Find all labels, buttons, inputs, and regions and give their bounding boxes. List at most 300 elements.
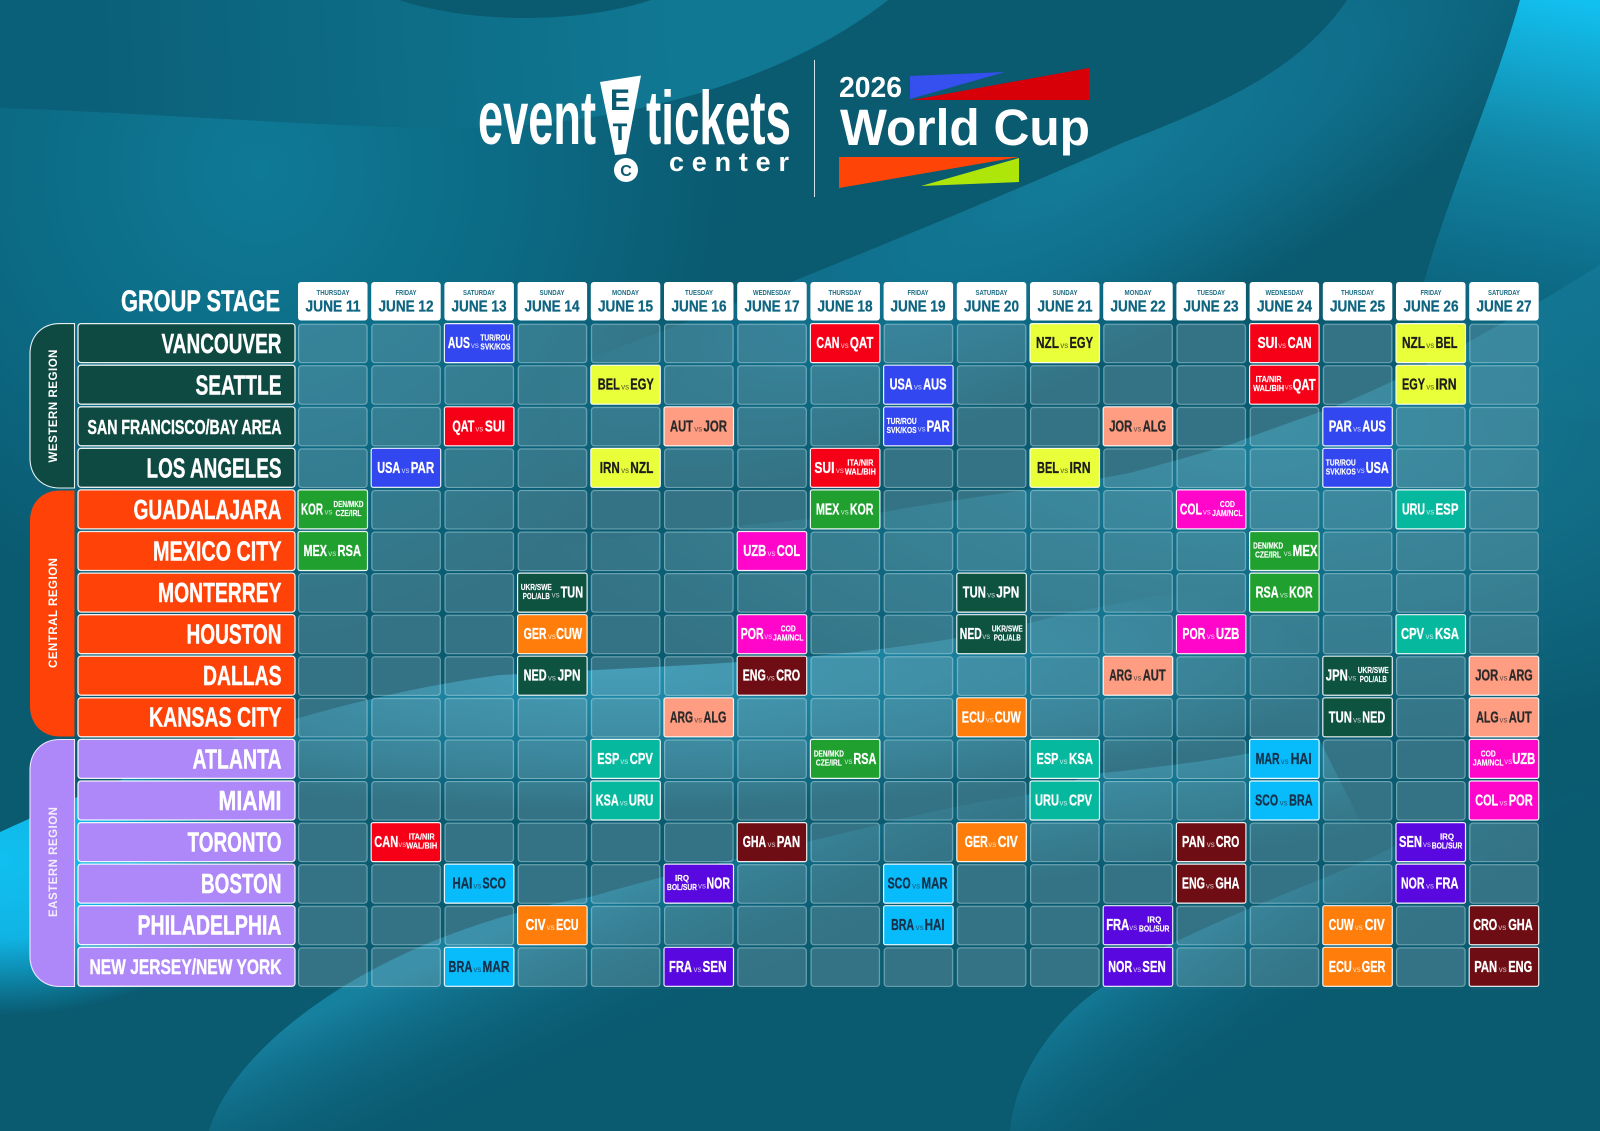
matches: New Jersey/New York: NOR [1108,959,1132,976]
matches: Los Angeles: SUI [814,460,834,477]
matches: Miami: COL [1475,792,1498,810]
matches: Toronto: CAN [374,834,398,851]
matches: Houston: GER [524,626,547,643]
matches: Houston: COD [781,624,796,634]
matches: Miami: vs [1499,798,1507,808]
matches: Boston: vs [912,882,920,891]
matches: Miami: vs [1060,798,1068,808]
matches: Vancouver: vs [1278,341,1286,350]
city labels: VANCOUVER [162,328,282,359]
matches: Houston: CPV [1401,626,1424,643]
matches: Houston: CUW [556,626,582,643]
matches: Philadelphia: vs [1129,923,1137,932]
matches: Seattle [591,365,1466,404]
matches: Dallas: vs [1499,674,1507,683]
region: eastern [30,740,74,986]
matches: Dallas: JPN [1326,668,1348,685]
matches: Seattle: EGY [630,377,654,394]
matches: Vancouver: vs [841,341,849,350]
matches: Atlanta: COD [1481,748,1496,758]
city labels: MIAMI [218,785,282,816]
city labels: MEXICO CITY [153,536,282,566]
date header row: JUNE 27 [1476,298,1532,316]
matches: Boston: ENG [1182,876,1205,893]
matches: Miami: SCO [1255,792,1278,810]
matches: Philadelphia: vs [1498,923,1506,932]
matches: Atlanta: vs [1060,757,1068,766]
date header row: SATURDAY [976,290,1008,297]
city labels: GUADALAJARA [134,494,282,525]
region: western [30,324,74,488]
matches: Los Angeles: vs [1357,466,1365,475]
date header row: JUNE 11 [306,298,361,316]
matches: Mexico City: vs [1284,549,1292,558]
matches: Mexico City: UZB [743,543,766,560]
matches: Atlanta [591,739,1539,778]
date header row [298,282,1539,320]
matches: Guadalajara: vs [1203,507,1211,516]
date header row: THURSDAY [1341,290,1374,297]
date header row: WEDNESDAY [1266,290,1304,297]
matches: New Jersey/New York: MAR [482,959,509,976]
date header row: JUNE 17 [744,298,800,316]
date header row: SUNDAY [540,290,565,297]
matches: Guadalajara: MEX [816,501,840,518]
matches: Monterrey: vs [987,591,995,600]
matches: Kansas City: NED [1362,709,1385,726]
matches: Monterrey: TUN [963,585,986,602]
city labels: SEATTLE [196,370,282,400]
matches: Vancouver [444,324,1465,363]
matches: Philadelphia: HAI [925,917,945,934]
city labels: DALLAS [203,660,282,691]
matches: Dallas: POL/ALB [1360,674,1387,684]
matches: Seattle: vs [1285,383,1293,392]
city labels [78,324,295,986]
matches: Kansas City: ALG [1476,709,1499,726]
matches: Vancouver: EGY [1070,335,1093,352]
matches: Dallas: AUT [1143,668,1166,685]
matches: Vancouver: BEL [1436,335,1458,352]
city labels: BOSTON [201,868,282,899]
matches: Los Angeles: WAL/BIH [845,466,876,476]
matches: Toronto: SEN [1399,834,1422,851]
matches: San Francisco: AUS [1362,418,1386,435]
matches: Monterrey: RSA [1256,585,1279,602]
city labels: HOUSTON [186,618,282,650]
divider line [814,60,815,197]
logo: 2026 World Cup: 2026 [839,72,902,104]
matches: Kansas City: TUN [1329,709,1352,726]
city labels: KANSAS CITY [149,702,282,732]
logo: 2026 World Cup: World Cup [840,99,1090,156]
matches: Philadelphia: vs [1355,923,1363,932]
matches: Monterrey [518,573,1319,612]
matches: Dallas: vs [548,674,556,683]
matches: New Jersey/New York: ECU [1329,959,1352,976]
matches: Miami: vs [620,798,628,808]
matches: Philadelphia: vs [547,923,555,932]
city labels: ATLANTA [192,744,282,774]
matches: San Francisco: vs [918,424,926,433]
matches: Los Angeles: TUR/ROU [1326,457,1356,467]
date header row: THURSDAY [828,290,862,297]
matches: Houston: vs [1207,632,1215,641]
matches: Philadelphia: BRA [891,917,914,934]
matches: Toronto: vs [988,840,996,849]
matches: New Jersey/New York: BRA [448,959,472,976]
city labels: PHILADELPHIA [138,910,282,940]
matches: Monterrey: vs [1280,591,1288,600]
matches: Atlanta: ESP [597,751,619,768]
matches: Toronto: PAN [1182,834,1205,851]
matches: Mexico City: vs [328,549,336,558]
matches: Miami: BRA [1289,792,1313,810]
date header row: TUESDAY [685,290,713,297]
matches: Monterrey: TUN [561,585,583,602]
logo: event tickets center: tickets [646,76,791,161]
matches: Atlanta: UZB [1512,751,1535,768]
matches: Los Angeles: BEL [1037,460,1059,477]
matches: Seattle: IRN [1436,377,1456,394]
matches: Atlanta: CZE/IRL [816,757,842,767]
matches: Mexico City: COL [777,543,800,560]
matches: Houston: vs [982,632,990,641]
matches: New Jersey/New York [444,947,1539,986]
date header row: JUNE 16 [672,298,727,316]
matches: Seattle: vs [621,383,629,392]
matches: New Jersey/New York: vs [1353,965,1361,974]
matches: Guadalajara: URU [1402,501,1425,518]
matches: Boston: HAI [452,876,472,893]
matches: Atlanta: HAI [1291,751,1312,768]
matches: Houston: POR [741,626,764,643]
matches: Houston: UZB [1216,626,1239,643]
matches: San Francisco: vs [1133,424,1141,433]
date header row: MONDAY [612,290,639,297]
matches: Guadalajara: vs [841,507,849,516]
logo: event tickets center: center [669,147,789,177]
matches: Miami: URU [1035,792,1059,810]
matches: Guadalajara: CZE/IRL [336,508,362,518]
matches: Boston: vs [1206,882,1214,891]
matches: Seattle: vs [1426,383,1434,392]
date header row: JUNE 14 [524,298,580,316]
matches: Vancouver: CAN [816,335,839,352]
matches: New Jersey/New York: vs [1499,965,1507,974]
matches: Vancouver: vs [471,341,479,350]
matches: Philadelphia: ECU [556,917,579,934]
matches: New Jersey/New York: vs [1133,965,1141,974]
matches: Los Angeles: USA [377,460,400,477]
matches: Atlanta: vs [1504,757,1512,766]
matches: Miami: CPV [1069,792,1092,810]
matches: Guadalajara: KOR [850,501,873,518]
matches: Los Angeles: IRN [600,460,620,477]
date header row: FRIDAY [908,290,929,297]
matches: Vancouver: SUI [1258,335,1278,352]
matches: Los Angeles: vs [402,466,410,475]
logo: event tickets center: E [610,84,630,117]
city labels: MONTERREY [158,577,282,608]
matches: Boston: vs [1426,882,1434,891]
date header row: SUNDAY [1052,290,1078,297]
matches: Miami: KSA [596,792,619,810]
matches: Los Angeles: ITA/NIR [847,457,873,467]
date header row: JUNE 25 [1330,298,1385,316]
matches: New Jersey/New York: SEN [1142,959,1166,976]
matches: Boston: vs [698,882,706,891]
matches: Toronto: GER [965,834,988,851]
matches: New Jersey/New York: SEN [702,959,726,976]
matches: Boston: vs [473,882,481,891]
matches: Kansas City: vs [1353,715,1361,724]
matches: Atlanta: MAR [1256,751,1280,768]
matches: Los Angeles: SVK/KOS [1326,466,1356,476]
matches: Atlanta: KSA [1069,751,1093,768]
matches: Boston: NOR [706,876,730,893]
matches: Atlanta: vs [1281,757,1289,766]
matches: Guadalajara: KOR [301,501,323,518]
matches: Guadalajara: vs [1426,507,1434,516]
matches: Houston: NED [960,626,982,643]
matches: Atlanta: RSA [853,751,876,768]
matches: Kansas City: ARG [670,709,693,726]
matches: Dallas: ARG [1509,668,1533,685]
matches: Guadalajara: COD [1220,499,1235,509]
matches: Philadelphia: FRA [1106,917,1129,934]
matches: Atlanta: vs [620,757,628,766]
matches: Philadelphia [518,906,1539,945]
matches: Monterrey: vs [552,591,560,600]
matches: Houston: JAM/NCL [773,633,803,643]
matches: Boston: BOL/SUR [667,882,697,892]
matches: Toronto: GHA [743,834,766,851]
matches: Atlanta: CPV [630,751,653,768]
matches: Mexico City: CZE/IRL [1255,550,1281,560]
matches: Mexico City [298,532,1319,570]
matches: Monterrey: UKR/SWE [521,582,552,592]
matches: Philadelphia: CUW [1329,917,1354,934]
matches: Kansas City: CUW [995,709,1021,726]
matches: Dallas [518,656,1539,695]
date header row: JUNE 20 [964,298,1019,316]
matches: San Francisco: PAR [1329,418,1352,435]
matches: Dallas: vs [767,674,775,683]
matches: Los Angeles: vs [1060,466,1068,475]
matches: San Francisco: PAR [927,418,950,435]
matches: Guadalajara: COL [1180,501,1202,518]
matches: San Francisco: JOR [704,418,727,435]
matches: Miami [591,781,1539,820]
matches: Seattle: EGY [1402,377,1425,394]
matches: Boston: GHA [1215,876,1239,893]
matches: Seattle: vs [914,383,922,392]
logo: event tickets center: C [620,163,632,180]
matches: San Francisco: SUI [485,418,505,435]
matches: Houston: POR [1182,626,1205,643]
matches: New Jersey/New York: PAN [1474,959,1497,976]
matches: Kansas City: vs [694,715,702,724]
matches: Toronto: vs [1423,840,1431,849]
matches: Vancouver: NZL [1402,335,1425,352]
matches: Los Angeles: vs [621,466,629,475]
matches: New Jersey/New York: GER [1362,959,1385,976]
matches: Toronto: vs [768,840,776,849]
matches: Toronto: BOL/SUR [1432,841,1462,851]
matches: Vancouver: TUR/ROU [480,333,510,343]
matches: Toronto: CIV [998,834,1018,851]
matches: Guadalajara [298,490,1466,529]
date header row: MONDAY [1124,290,1152,297]
matches: Kansas City [664,698,1539,737]
matches: Philadelphia: BOL/SUR [1139,924,1169,934]
matches: San Francisco: JOR [1109,418,1132,435]
date header row: JUNE 24 [1257,298,1312,316]
matches: San Francisco [444,407,1392,446]
matches: Boston: FRA [1436,876,1458,893]
matches: Los Angeles [371,448,1392,487]
matches: Vancouver: vs [1426,341,1434,350]
matches: Los Angeles: NZL [630,460,653,477]
matches: Dallas: CRO [776,668,800,685]
matches: New Jersey/New York: FRA [669,959,692,976]
matches: Miami: vs [1280,798,1288,808]
matches: New Jersey/New York: vs [694,965,702,974]
matches: San Francisco: vs [694,424,702,433]
matches: San Francisco: QAT [452,418,475,435]
matches: Seattle: ITA/NIR [1256,374,1282,384]
matches: Kansas City: vs [986,715,994,724]
matches: San Francisco: SVK/KOS [887,425,917,435]
region: central [30,490,74,736]
matches: Philadelphia: CIV [1365,917,1385,934]
matches: Dallas: vs [1348,674,1356,683]
matches: Kansas City: vs [1499,715,1507,724]
matches: Vancouver: vs [1060,341,1068,350]
date header row: JUNE 26 [1404,298,1459,316]
matches: Kansas City: ECU [962,709,985,726]
matches: Dallas: ARG [1109,668,1132,685]
matches: Guadalajara: JAM/NCL [1212,508,1243,518]
date header row: THURSDAY [316,290,350,297]
date header row: JUNE 15 [598,298,653,316]
matches: San Francisco: TUR/ROU [887,416,917,426]
date header row: SATURDAY [463,290,495,297]
matches: San Francisco: ALG [1143,418,1166,435]
matches: Houston: vs [548,632,556,641]
matches: Monterrey: JPN [996,585,1019,602]
logo: event tickets center: event [478,76,596,161]
date header row: JUNE 13 [452,298,507,316]
date header row: SATURDAY [1488,290,1520,297]
date header row: JUNE 18 [818,298,873,316]
date header row: FRIDAY [1420,290,1442,297]
date header row: TUESDAY [1197,290,1225,297]
matches: Seattle: WAL/BIH [1253,383,1284,393]
matches: Guadalajara: ESP [1436,501,1458,518]
date header row: FRIDAY [396,290,417,297]
region: eastern: EASTERN REGION [48,807,60,917]
matches: Houston [518,615,1466,654]
matches: Houston: KSA [1435,626,1459,643]
matches: Boston [444,864,1465,903]
matches: Monterrey: KOR [1289,585,1313,602]
heading: group stage: GROUP STAGE [121,285,280,318]
matches: Houston: vs [1426,632,1434,641]
matches: Miami: URU [629,792,653,810]
matches: Toronto: WAL/BIH [406,841,437,851]
matches: Toronto: IRQ [1440,832,1454,842]
matches: Mexico City: MEX [1293,543,1318,560]
matches: Vancouver: SVK/KOS [480,342,511,352]
matches: Seattle: BEL [598,377,620,394]
matches: Toronto [371,823,1466,862]
matches: Toronto: PAN [777,834,800,851]
matches: Boston: NOR [1401,876,1424,893]
matches: Boston: SCO [888,876,911,893]
date header row: JUNE 19 [890,298,946,316]
city labels: TORONTO [188,826,282,858]
matches: Guadalajara: DEN/MKD [334,499,364,509]
matches: Dallas: JOR [1475,668,1498,685]
date header row: JUNE 22 [1110,298,1166,316]
matches: Kansas City: ALG [704,709,726,726]
matches: Kansas City: AUT [1509,709,1532,726]
matches: Los Angeles: PAR [411,460,434,477]
matches: New Jersey/New York: vs [473,965,481,974]
logo: event tickets center: T [613,119,628,146]
matches: Dallas: JPN [558,668,581,685]
matches: San Francisco: AUT [670,418,693,435]
matches: Mexico City: RSA [338,543,361,560]
city labels: SAN FRANCISCO/BAY AREA [88,417,282,439]
matches: Philadelphia: GHA [1508,917,1533,934]
matches: Monterrey: POL/ALB [523,591,550,601]
logo: event tickets center [478,76,791,182]
matches: Vancouver: AUS [448,335,470,352]
matches: Boston: SCO [482,876,506,893]
matches: Vancouver: NZL [1036,335,1059,352]
matches: Atlanta: ESP [1036,751,1058,768]
matches: Mexico City: MEX [304,543,327,560]
matches: Toronto: CRO [1216,834,1239,851]
matches: Toronto: vs [398,840,406,849]
date header row: JUNE 12 [378,298,434,316]
matches: Houston: vs [764,632,772,641]
matches: Vancouver: CAN [1288,335,1312,352]
matches: Atlanta: vs [844,757,852,766]
matches: Boston: IRQ [675,873,689,883]
region: western: WESTERN REGION [48,350,60,462]
matches: Seattle: QAT [1293,377,1316,394]
city labels: LOS ANGELES [146,452,282,484]
matches: Houston: UKR/SWE [992,624,1023,634]
matches: Vancouver: QAT [850,335,874,352]
matches: Los Angeles: vs [836,466,844,475]
matches: Los Angeles: USA [1366,460,1389,477]
matches: Toronto: vs [1207,840,1215,849]
matches: Miami: POR [1509,792,1533,810]
matches: San Francisco: vs [1353,424,1361,433]
matches: Atlanta: DEN/MKD [814,748,844,758]
empty schedule grid [298,324,1542,989]
matches: Dallas: NED [524,668,547,685]
matches: Seattle: AUS [923,377,947,394]
matches: Dallas: ENG [743,668,766,685]
matches: Dallas: vs [1133,674,1141,683]
matches: Philadelphia: CRO [1473,917,1497,934]
